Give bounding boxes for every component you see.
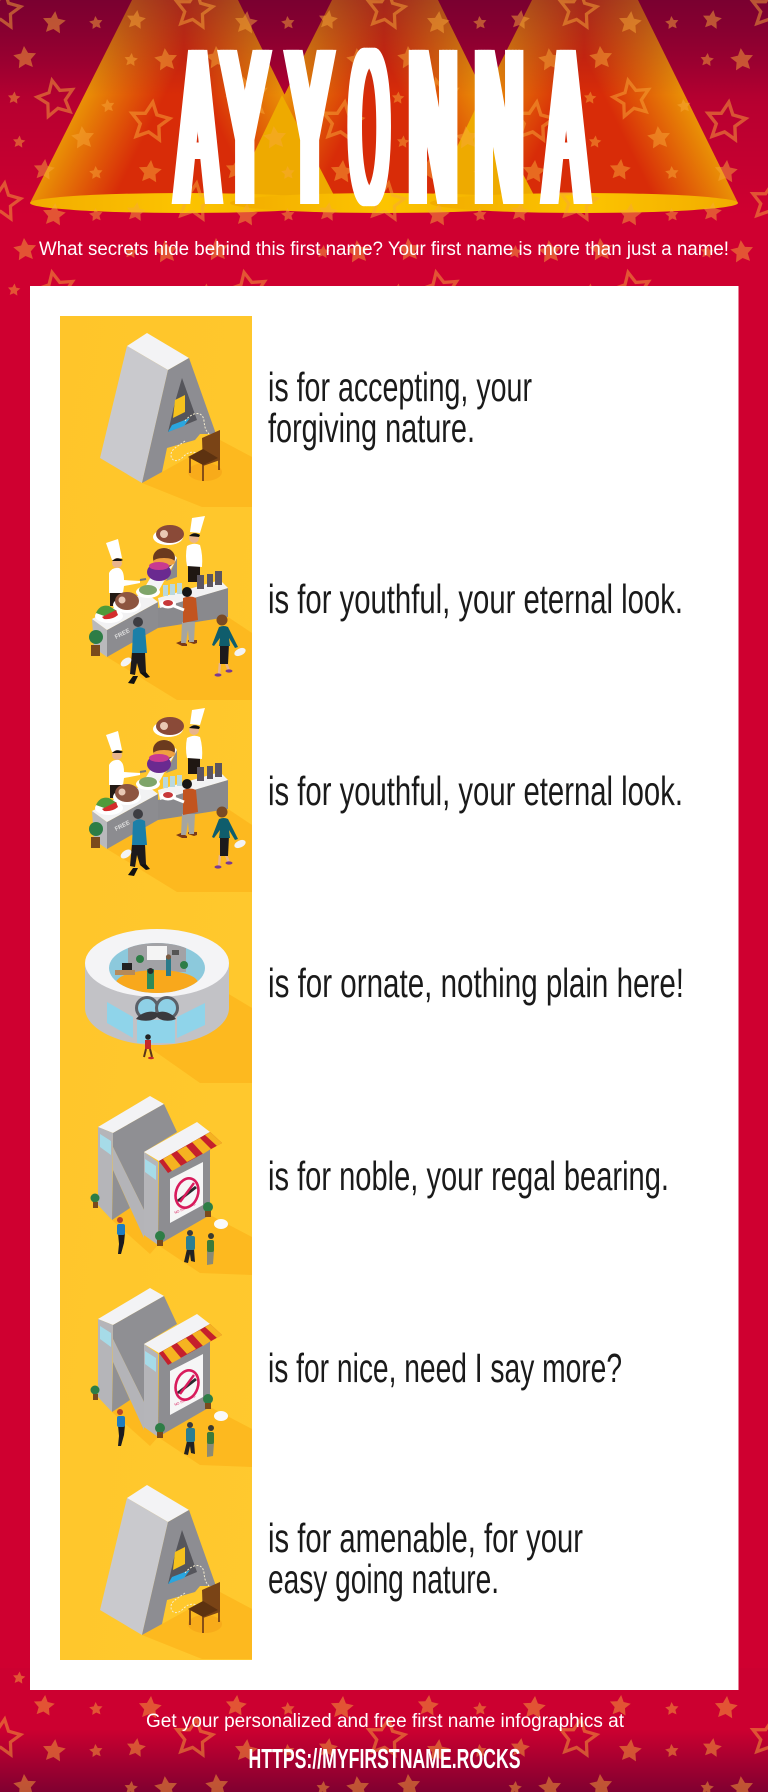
spotlight right <box>430 0 738 203</box>
text: second A: is for amenable, for your <box>268 1515 583 1561</box>
white content card <box>30 286 738 1690</box>
icon: second letter Y buffet <box>89 708 252 892</box>
icon: second letter A building <box>100 1485 252 1659</box>
title: A <box>178 2 217 252</box>
text: second N: is for nice, need I say more? <box>268 1345 622 1391</box>
icon: letter N shop: NO SMOKING <box>174 1202 196 1215</box>
text: second A <box>268 1515 583 1602</box>
title: Y <box>222 2 267 252</box>
title: O <box>350 2 388 252</box>
plain side margins <box>0 302 768 1668</box>
glasses and moustache sign <box>136 998 178 1021</box>
text: A <box>268 364 532 451</box>
title: Y <box>288 2 331 252</box>
icon: letter Y buffet: FREE <box>114 628 131 641</box>
spotlight left <box>30 0 338 203</box>
text: A: forgiving nature. <box>268 405 475 451</box>
footer url: HTTPS://MYFIRSTNAME.ROCKS <box>248 1743 520 1774</box>
icon: second letter Y buffet: FREE <box>114 820 131 833</box>
title: N <box>410 2 456 252</box>
icon: letter Y buffet <box>89 516 252 700</box>
spotlight overlaps <box>230 95 538 203</box>
spotlight centre <box>230 0 538 203</box>
text: A: is for accepting, your <box>268 364 532 410</box>
icon: second letter N shop <box>90 1288 252 1467</box>
title: N <box>476 2 522 252</box>
spotlights <box>30 0 738 213</box>
title <box>172 2 592 252</box>
yellow illustration column <box>60 316 252 1660</box>
subtitle: What secrets hide behind this first name? Your first name is more than just a name! <box>39 239 729 260</box>
icon: letter N shop <box>90 1096 252 1275</box>
person walking <box>144 1034 154 1059</box>
footer line: Get your personalized and free first name infographics at <box>146 1711 625 1732</box>
title: A <box>546 2 586 252</box>
icon: letter O optician <box>85 929 252 1083</box>
icon: second letter N shop: NO SMOKING <box>174 1394 196 1407</box>
text: second A: easy going nature. <box>268 1556 499 1602</box>
spotlight floor pools <box>30 193 738 213</box>
icon: letter A building <box>100 333 252 507</box>
